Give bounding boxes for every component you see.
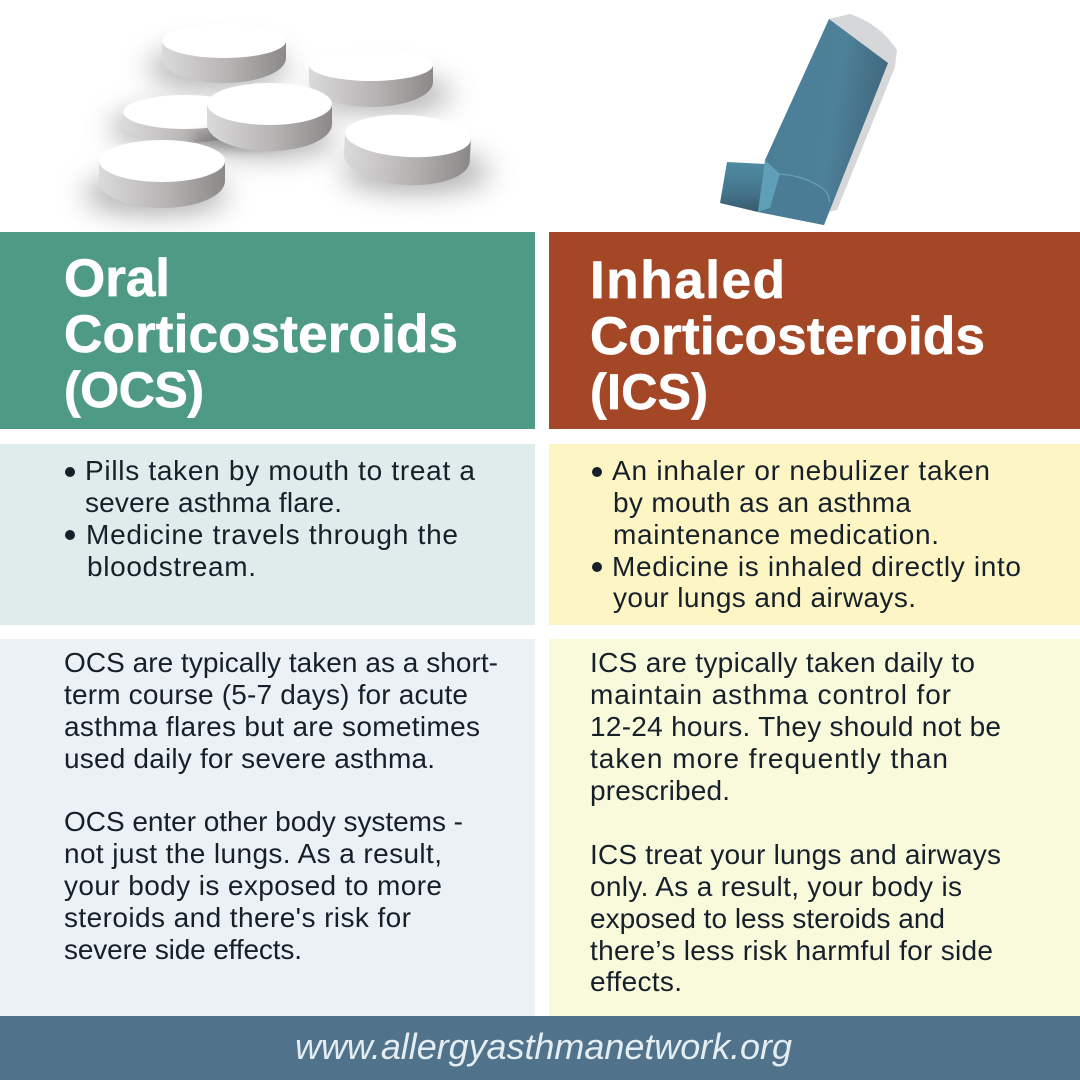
bullet list: ICS: maintenance medication. bbox=[613, 519, 939, 550]
text block: OCS risks: severe side effects. bbox=[64, 934, 302, 965]
heading: Oral Corticosteroids (OCS): Oral bbox=[64, 249, 170, 308]
heading: Oral Corticosteroids (OCS): (OCS) bbox=[64, 362, 204, 418]
bullet list: OCS: bloodstream. bbox=[87, 551, 256, 582]
panel: ICS heading bbox=[549, 232, 1080, 429]
inhaler shadow bbox=[828, 14, 897, 212]
text block: OCS risks: your body is exposed to more bbox=[64, 870, 442, 901]
bullet list: OCS bbox=[65, 455, 475, 582]
bullet list: OCS: severe asthma flare. bbox=[85, 487, 342, 518]
text block: OCS usage bbox=[64, 647, 498, 774]
inhaler mouthpiece bbox=[720, 162, 765, 212]
website url: www.allergyasthmanetwork.org bbox=[295, 1026, 792, 1067]
text block: OCS usage: used daily for severe asthma. bbox=[64, 743, 435, 774]
icon: white tablets bbox=[84, 24, 490, 214]
panel: ICS summary bullets bbox=[549, 444, 1080, 625]
bullet list: OCS: Medicine travels through the bbox=[86, 519, 458, 550]
inhaler body bbox=[758, 19, 888, 225]
bullet list: ICS: Medicine is inhaled directly into bbox=[612, 551, 1021, 582]
text block: OCS risks: OCS enter other body systems - bbox=[64, 806, 463, 837]
text block: ICS usage: prescribed. bbox=[590, 775, 730, 806]
inhaler collar highlight bbox=[758, 160, 780, 212]
tablet 1 bbox=[162, 24, 286, 83]
text block: OCS risks bbox=[64, 806, 463, 965]
bullet list: OCS: Pills taken by mouth to treat a bbox=[85, 455, 475, 486]
bullet list: ICS: your lungs and airways. bbox=[613, 582, 916, 613]
text block: ICS risks: only. As a result, your body is bbox=[590, 871, 962, 902]
text block: OCS usage: asthma flares but are sometimes bbox=[64, 711, 480, 742]
text block: ICS usage: 12-24 hours. They should not be bbox=[590, 711, 1001, 742]
tablet 2 bbox=[309, 49, 433, 107]
footer band with website bbox=[0, 1016, 1080, 1080]
bullet list: ICS: by mouth as an asthma bbox=[613, 487, 911, 518]
text block: ICS usage bbox=[590, 647, 1001, 806]
heading: Inhaled Corticosteroids (ICS): (ICS) bbox=[590, 364, 708, 420]
text block: OCS risks: steroids and there's risk for bbox=[64, 902, 411, 933]
panel: OCS details bbox=[0, 639, 535, 1016]
text block: OCS risks: not just the lungs. As a result, bbox=[64, 838, 442, 869]
text block: ICS risks: ICS treat your lungs and airways bbox=[590, 839, 1001, 870]
bullet list: ICS: An inhaler or nebulizer taken bbox=[612, 455, 990, 486]
text block: ICS usage: taken more frequently than bbox=[590, 743, 948, 774]
tablet 5 bbox=[99, 140, 225, 208]
text block: ICS risks: there’s less risk harmful for side bbox=[590, 935, 993, 966]
tablet 4 bbox=[207, 83, 332, 151]
panel: ICS details bbox=[549, 639, 1080, 1016]
heading: Oral Corticosteroids (OCS) bbox=[64, 249, 458, 418]
text block: ICS usage: ICS are typically taken daily to bbox=[590, 647, 975, 678]
panel: OCS heading bbox=[0, 232, 535, 429]
heading: Inhaled Corticosteroids (ICS) bbox=[590, 251, 985, 420]
text block: OCS usage: OCS are typically taken as a short- bbox=[64, 647, 498, 678]
text block: ICS risks: effects. bbox=[590, 966, 682, 997]
panel: OCS summary bullets bbox=[0, 444, 535, 625]
tablet 6 bbox=[343, 112, 472, 188]
icon: inhaler bbox=[720, 14, 897, 225]
heading: Oral Corticosteroids (OCS): Corticosteroids bbox=[64, 305, 458, 364]
heading: Inhaled Corticosteroids (ICS): Inhaled bbox=[590, 251, 785, 310]
text block: ICS risks bbox=[590, 839, 1001, 997]
heading: Inhaled Corticosteroids (ICS): Corticosteroids bbox=[590, 307, 985, 366]
text block: ICS usage: maintain asthma control for bbox=[590, 679, 951, 710]
text block: ICS risks: exposed to less steroids and bbox=[590, 903, 945, 934]
bullet list: ICS bbox=[592, 455, 1021, 613]
tablet 3 bbox=[123, 95, 247, 143]
text block: OCS usage: term course (5-7 days) for acute bbox=[64, 679, 468, 710]
